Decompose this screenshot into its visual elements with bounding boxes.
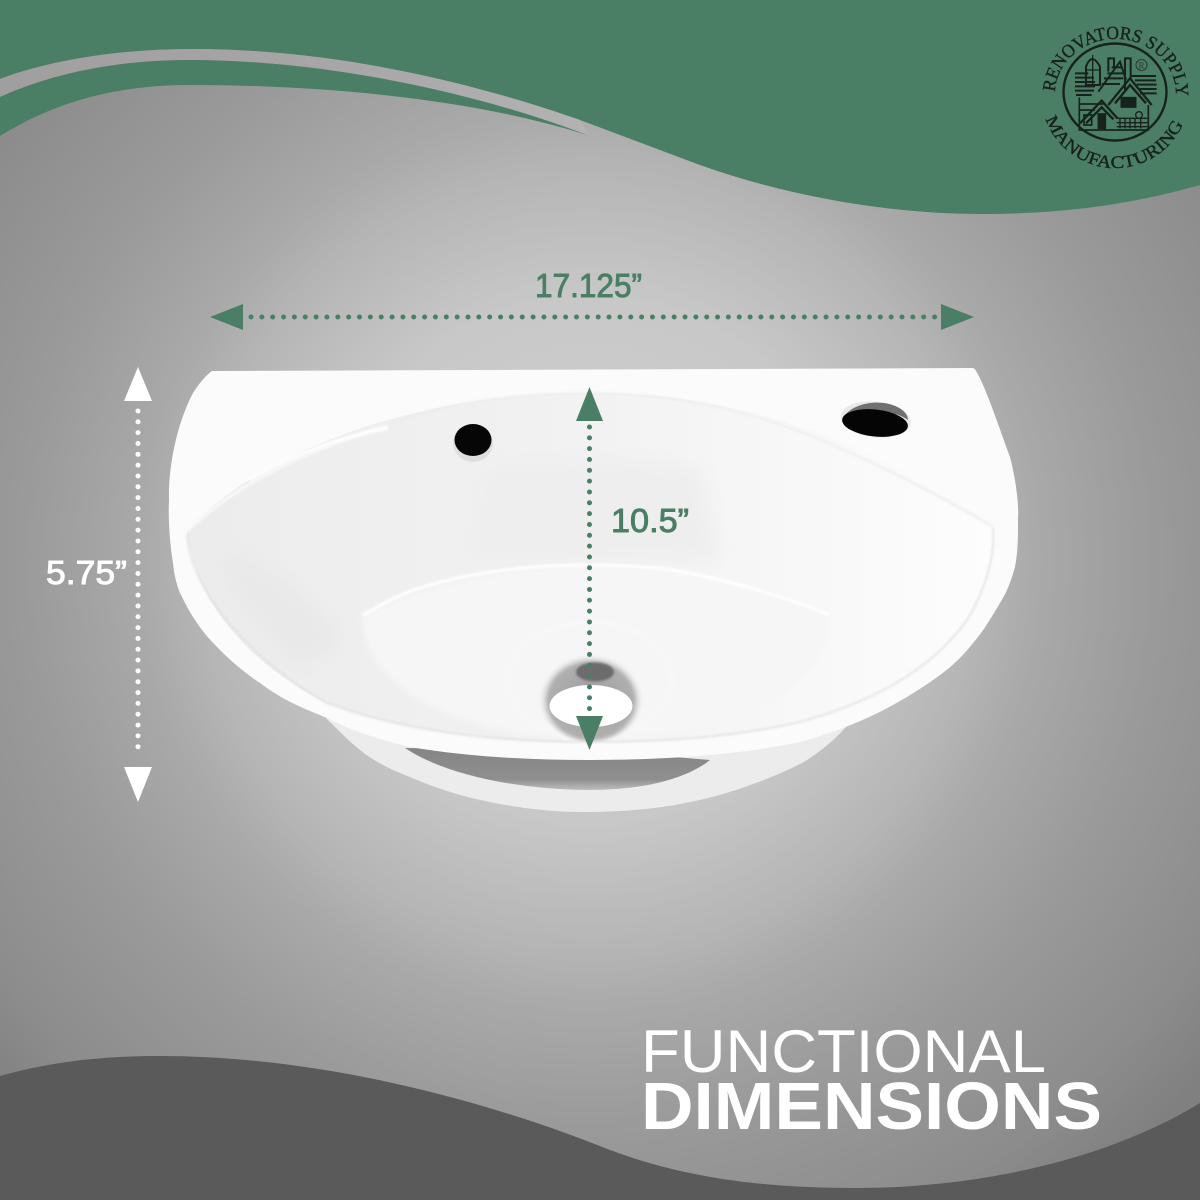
width label: 17.125”	[535, 267, 642, 304]
logo house drawing	[1075, 55, 1157, 130]
faucet hole	[453, 424, 493, 462]
width arrow	[210, 304, 974, 330]
sink rim highlights	[187, 393, 993, 742]
height dimension: 5.75 inches	[46, 367, 152, 802]
drain	[508, 622, 672, 742]
depth dimension: 10.5 inches	[576, 387, 689, 750]
title	[641, 1018, 1102, 1144]
depth label: 10.5”	[611, 502, 689, 539]
footer wave: dark gray	[0, 1056, 1200, 1200]
mounting hole	[839, 398, 913, 441]
sink basin	[187, 395, 720, 739]
logo registered mark	[1136, 60, 1147, 70]
height label: 5.75”	[46, 554, 127, 591]
title line 1: FUNCTIONAL	[641, 1018, 1046, 1085]
logo registered mark: R	[1138, 60, 1145, 70]
sink bowl body	[169, 368, 1018, 760]
sink pedestal underside	[326, 718, 850, 812]
logo ring	[1064, 44, 1166, 140]
header wave: green	[0, 0, 1200, 214]
width dimension: 17.125 inches	[210, 267, 974, 330]
height arrow	[124, 367, 152, 802]
logo: Renovators Supply Manufacturing	[1042, 26, 1189, 168]
depth arrow	[576, 387, 603, 750]
logo text: top arc: RENOVATORS SUPPLY	[1042, 26, 1189, 96]
logo text: bottom arc: MANUFACTURING	[1045, 114, 1182, 168]
sink photo	[169, 368, 1018, 812]
title line 2: DIMENSIONS	[641, 1069, 1102, 1144]
